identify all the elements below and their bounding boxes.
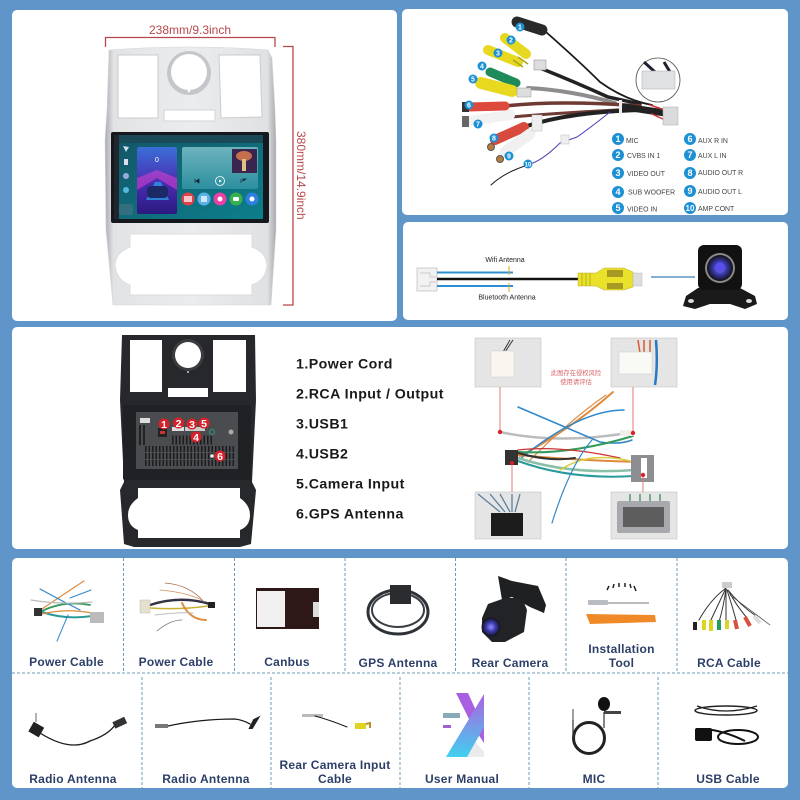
RCA legend — [612, 133, 743, 214]
port list: 1.Power Cord — [296, 356, 393, 372]
panel: accessories — [12, 558, 788, 788]
black fascia rear view — [120, 335, 256, 547]
screen: app icons — [182, 192, 258, 206]
callout numbers on plugs: 5 — [471, 76, 475, 84]
red warning text: 此图存在侵权风险 — [551, 368, 602, 377]
port list: 3.USB1 — [296, 416, 348, 432]
item: RCA cable: RCA Cable — [697, 656, 761, 670]
item: user manual: User Manual — [425, 772, 499, 786]
RCA legend: 3 — [615, 168, 621, 178]
connection line — [651, 276, 695, 278]
thumbnail: bottom right plug — [611, 492, 677, 539]
screen: speed card: 0 — [155, 157, 159, 164]
RCA legend: VIDEO OUT — [627, 171, 666, 178]
item: radio antenna 2 — [155, 718, 258, 786]
item: radio antenna 1: Radio Antenna — [29, 772, 117, 786]
item: GPS antenna: GPS Antenna — [359, 656, 438, 670]
item: installation tool — [586, 583, 656, 670]
icon: rear camera — [683, 245, 757, 309]
RCA legend: SUB WOOFER — [628, 190, 675, 196]
dimension: height — [283, 46, 308, 305]
RCA legend: AUX L IN — [698, 153, 726, 160]
item: radio antenna 2: Radio Antenna — [162, 772, 250, 786]
red port numbers: 3 — [189, 419, 195, 431]
silver fascia — [105, 47, 276, 305]
item: rear camera: Rear Camera — [472, 656, 548, 670]
red port numbers: 5 — [201, 418, 207, 430]
item: rear camera — [472, 576, 548, 670]
item: RCA cable — [695, 582, 770, 670]
panel: head unit dimensions — [12, 10, 397, 321]
item: MIC — [573, 697, 621, 786]
dimension: width: 238mm/9.3inch — [149, 23, 231, 37]
RCA legend: MIC — [626, 138, 639, 145]
item: USB cable — [695, 706, 760, 786]
item: power cable 1: Power Cable — [29, 655, 104, 669]
callout numbers on plugs: 4 — [480, 64, 484, 70]
antenna wires: Bluetooth Antenna — [478, 294, 536, 302]
thumbnail: top right socket — [611, 338, 677, 387]
connector inset — [636, 58, 680, 102]
screen: music card — [182, 147, 258, 189]
item: installation tool: Installation — [588, 642, 655, 656]
RCA legend: 4 — [615, 187, 621, 197]
callout numbers on plugs: 10 — [525, 162, 532, 168]
red leader lines — [498, 387, 645, 492]
item: power cable 2: Power Cable — [139, 655, 213, 669]
item: installation tool: Tool — [609, 656, 634, 670]
yellow RCA plug — [578, 268, 642, 290]
item: rear camera input cable: Rear Camera Input — [280, 758, 390, 772]
RCA legend: 10 — [686, 204, 695, 213]
dimension: width — [106, 23, 275, 47]
RCA legend: AUDIO OUT L — [698, 189, 742, 196]
thumbnail: bottom left plug — [475, 492, 541, 539]
RCA legend: AMP CONT — [698, 206, 735, 213]
RCA legend: 9 — [687, 186, 693, 196]
item: GPS antenna — [359, 585, 438, 670]
callout numbers on plugs: 1 — [518, 24, 522, 32]
port list: 2.RCA Input / Output — [296, 386, 444, 402]
dimension: height: 380mm/14.9inch — [294, 131, 308, 220]
thumbnail: top left socket — [475, 338, 541, 387]
red port numbers: 2 — [176, 418, 182, 430]
RCA wires — [491, 32, 678, 185]
antenna wires — [437, 257, 580, 302]
port list — [296, 356, 444, 522]
callout numbers on plugs: 8 — [492, 136, 496, 142]
RCA legend: 8 — [687, 168, 693, 178]
touchscreen — [111, 132, 269, 223]
panel: rear connections — [12, 327, 788, 549]
item: MIC: MIC — [583, 772, 605, 786]
screen: speed card — [137, 147, 177, 214]
RCA legend: AUX R IN — [698, 138, 728, 145]
red warning text: 使用请评估 — [560, 377, 592, 386]
harness diagram — [475, 338, 677, 539]
item: rear camera input cable — [280, 714, 390, 786]
RCA legend: VIDEO IN — [627, 206, 657, 214]
callout numbers on plugs: 9 — [507, 154, 511, 160]
callout numbers on plugs: 7 — [476, 122, 480, 128]
screen: side menu — [119, 146, 133, 215]
RCA plugs — [462, 22, 569, 162]
callout numbers on plugs — [464, 22, 532, 168]
harness wires — [500, 392, 654, 523]
port list: 4.USB2 — [296, 446, 348, 462]
callout numbers on plugs: 6 — [467, 102, 471, 110]
panel: RCA cable diagram — [402, 9, 788, 215]
head unit back — [123, 405, 251, 480]
item: user manual — [425, 693, 499, 786]
RCA legend: 1 — [615, 134, 621, 144]
red port numbers: 4 — [193, 432, 199, 444]
panel: antenna and camera connection — [403, 222, 788, 320]
red warning text — [551, 368, 602, 386]
RCA legend: 2 — [615, 150, 621, 160]
item: radio antenna 1 — [28, 713, 127, 786]
RCA legend: 6 — [687, 134, 693, 144]
item: USB cable: USB Cable — [696, 772, 760, 786]
item: rear camera input cable: Cable — [318, 772, 352, 786]
item: power cable 1 — [29, 581, 104, 669]
callout numbers on plugs: 2 — [509, 38, 513, 44]
item: power cable 2 — [139, 583, 215, 669]
RCA legend: 7 — [687, 150, 693, 160]
item: canbus — [256, 588, 319, 669]
port list: 5.Camera Input — [296, 476, 405, 492]
RCA legend: 5 — [615, 203, 621, 213]
connector block — [417, 268, 437, 291]
red port numbers: 6 — [217, 451, 223, 463]
RCA legend: CVBS IN 1 — [627, 153, 660, 160]
port list: 6.GPS Antenna — [296, 506, 404, 522]
RCA legend: AUDIO OUT R — [698, 170, 743, 177]
red port numbers — [158, 418, 226, 463]
antenna wires: Wifi Antenna — [485, 257, 525, 264]
red port numbers: 1 — [161, 419, 167, 431]
item: canbus: Canbus — [264, 655, 310, 669]
callout numbers on plugs: 3 — [496, 50, 500, 58]
